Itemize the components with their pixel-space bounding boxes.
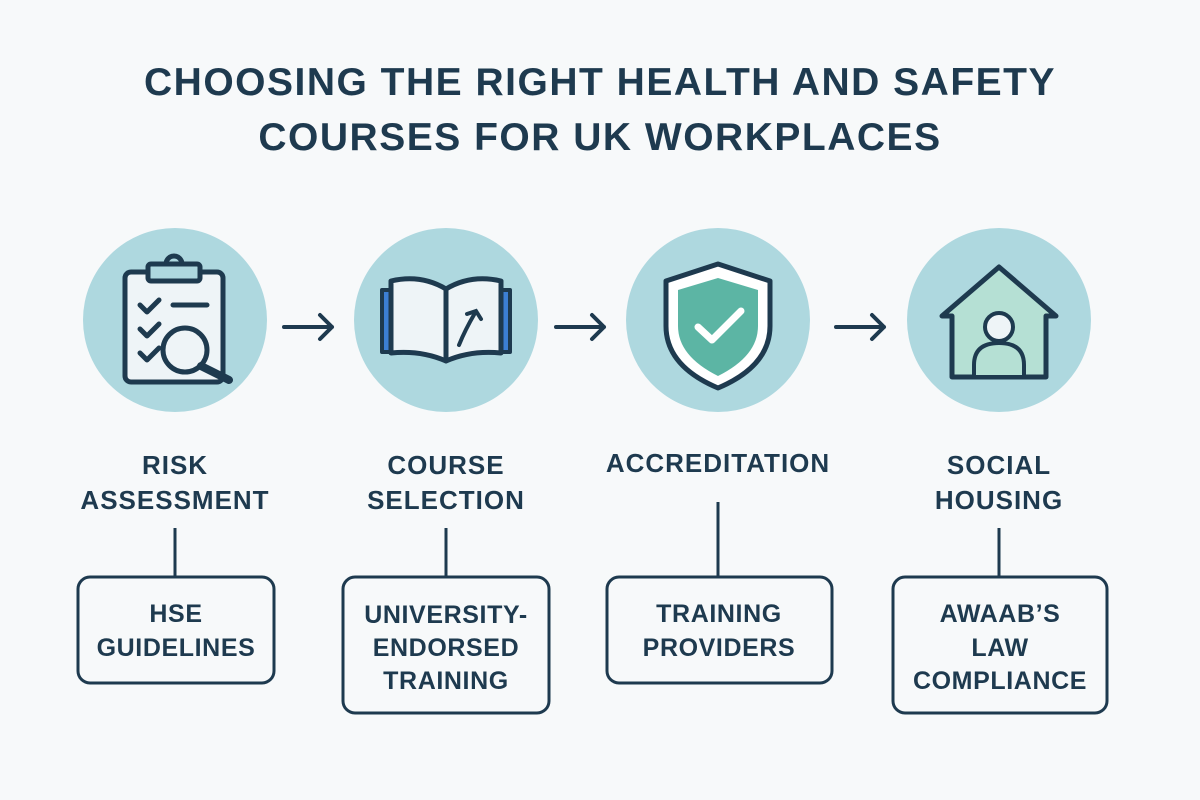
box: Awaab's law compliance: LAW [971,634,1029,662]
box: Awaab's law compliance: COMPLIANCE [913,667,1087,695]
step 3: accreditation [606,228,832,683]
box: university-endorsed training: ENDORSED [373,634,519,662]
title: COURSES FOR UK WORKPLACES [258,116,942,159]
label [935,450,1063,515]
title: CHOOSING THE RIGHT HEALTH AND SAFETY [144,61,1056,104]
box: training providers: PROVIDERS [643,634,795,662]
box: university-endorsed training: UNIVERSITY- [364,601,528,629]
box: university-endorsed training [343,577,549,713]
icon: book [354,228,538,412]
box: Awaab's law compliance [893,577,1107,713]
label: HOUSING [935,485,1063,515]
box: training providers: TRAINING [656,600,782,628]
label: RISK [142,450,208,480]
label: SOCIAL [947,450,1051,480]
box: HSE guidelines: HSE [149,600,203,628]
box: Awaab's law compliance: AWAAB’S [940,600,1060,628]
label: COURSE [387,450,505,480]
arrow [836,315,884,339]
title [144,61,1056,159]
label: ASSESSMENT [80,485,270,515]
box: university-endorsed training: TRAINING [383,667,509,695]
step 4: social housing [893,228,1107,713]
icon: house [907,228,1091,412]
icon: shield [626,228,810,412]
box: HSE guidelines: GUIDELINES [97,634,255,662]
box: training providers [607,577,832,683]
arrow [284,315,332,339]
label [80,450,270,515]
icon: clipboard circle [83,228,267,412]
arrow [556,315,604,339]
step 2: course selection [343,228,549,713]
box: HSE guidelines [78,577,274,683]
step 1: risk assessment [78,228,274,683]
label [367,450,525,515]
label: SELECTION [367,485,525,515]
label: ACCREDITATION [606,448,830,478]
